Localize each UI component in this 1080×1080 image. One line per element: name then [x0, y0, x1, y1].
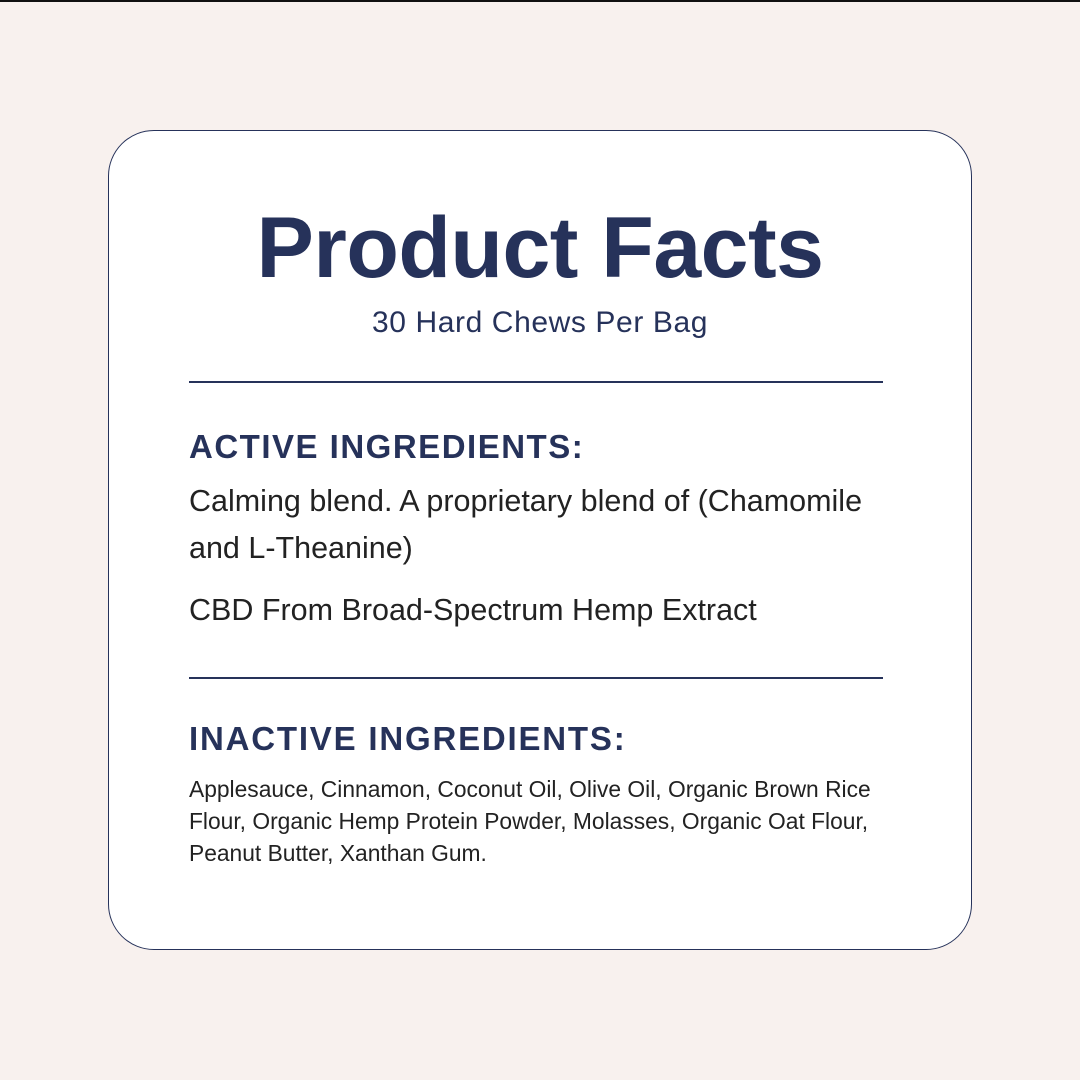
subtitle: 30 Hard Chews Per Bag — [372, 306, 708, 339]
text: inactive ingredients: Peanut Butter, Xanthan Gum. — [189, 840, 487, 866]
text: active ingredients: CBD From Broad-Spectrum Hemp Extract — [189, 593, 757, 627]
heading: inactive ingredients: INACTIVE INGREDIENTS: — [189, 720, 626, 757]
title: Product Facts — [257, 200, 823, 296]
text: inactive ingredients: Flour, Organic Hemp Protein Powder, Molasses, Organic Oat Flour, — [189, 808, 868, 834]
text: inactive ingredients — [189, 776, 871, 866]
text: active ingredients: and L-Theanine) — [189, 531, 413, 565]
text: inactive ingredients: Applesauce, Cinnamon, Coconut Oil, Olive Oil, Organic Brown Rice — [189, 776, 871, 802]
heading: active ingredients: ACTIVE INGREDIENTS: — [189, 428, 584, 465]
text: active ingredients — [189, 484, 862, 627]
text: active ingredients: Calming blend. A proprietary blend of (Chamomile — [189, 484, 862, 518]
panel: product facts card — [108, 130, 972, 950]
